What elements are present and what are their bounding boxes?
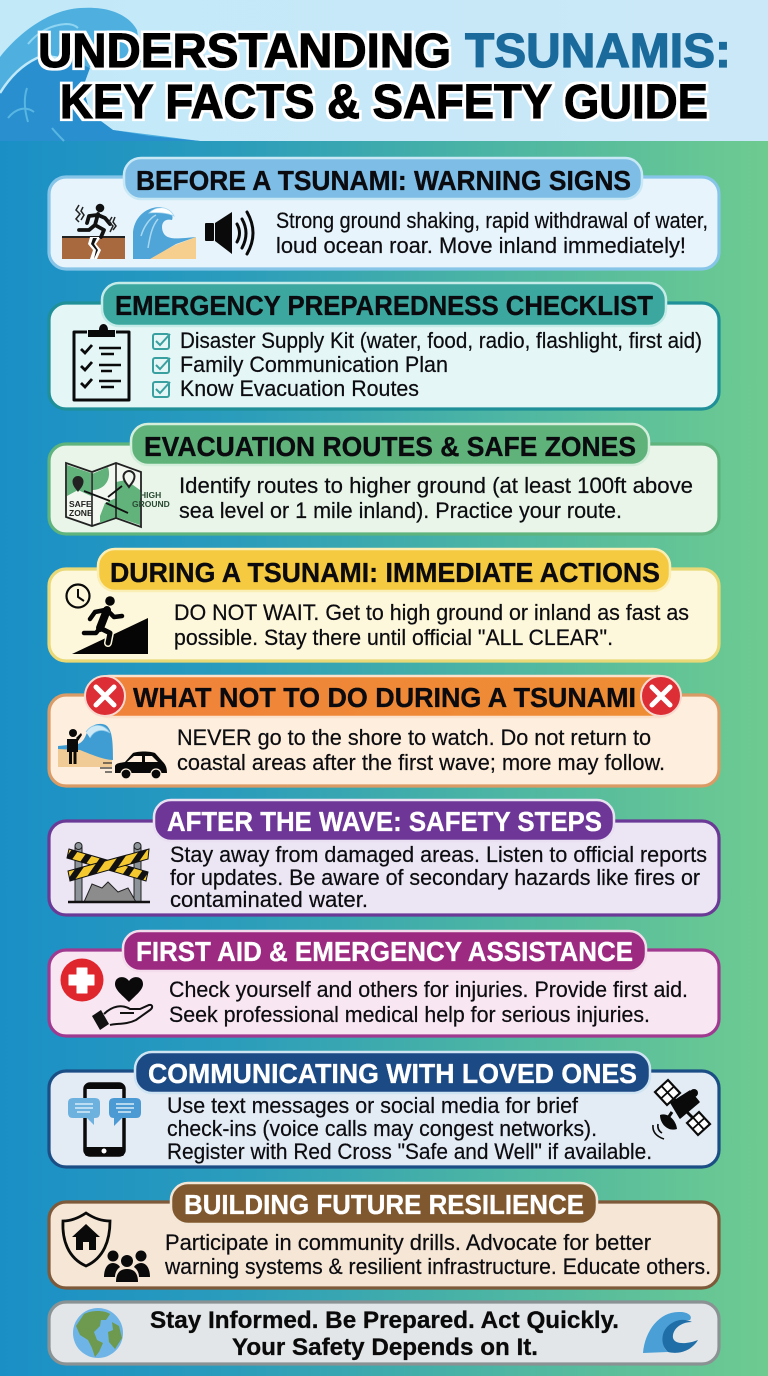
header band: [0, 0, 768, 141]
checklist items: Disaster Supply Kit (water, food, radio, flashlight, first aid): [180, 328, 702, 353]
icon: satellite: [653, 1080, 710, 1139]
heading: warning signs: BEFORE A TSUNAMI: WARNING SIGNS: [136, 165, 631, 196]
icon: globe: [73, 1308, 123, 1358]
heading: safety steps: AFTER THE WAVE: SAFETY STEPS: [167, 806, 602, 837]
text: resilience: Participate in community drills. Advocate for better: [165, 1230, 651, 1255]
text: safety steps: Stay away from damaged areas. Listen to official reports: [170, 842, 707, 867]
text: what not to do: [177, 725, 665, 775]
text: first aid: Seek professional medical help for serious injuries.: [169, 1002, 650, 1027]
icon: check 3: [153, 382, 170, 397]
text: resilience: warning systems & resilient infrastructure. Educate others.: [164, 1254, 711, 1279]
title: TSUNAMIS:: [465, 25, 731, 78]
heading: checklist: EMERGENCY PREPAREDNESS CHECKLIST: [115, 290, 653, 321]
panel: closing message: [49, 1302, 719, 1364]
text: loved ones: check-ins (voice calls may congest networks).: [167, 1116, 597, 1141]
text: evacuation: sea level or 1 mile inland). Practice your route.: [179, 498, 622, 523]
text: evacuation: Identify routes to higher ground (at least 100ft above: [179, 473, 693, 498]
text: warning signs: [276, 208, 708, 258]
icon: closing wave: [643, 1312, 698, 1353]
text: closing message: [150, 1307, 619, 1361]
icon: wave on beach: [133, 207, 196, 259]
checklist items: Know Evacuation Routes: [180, 376, 419, 401]
text: immediate actions: DO NOT WAIT. Get to high ground or inland as fast as: [174, 600, 689, 625]
panel: evacuation routes: [49, 424, 719, 534]
text: closing message: Your Safety Depends on It.: [232, 1334, 538, 1361]
text: first aid: Check yourself and others for injuries. Provide first aid.: [169, 977, 688, 1002]
icon: map: ZONE: [69, 508, 93, 518]
text: safety steps: [170, 842, 707, 912]
icon: check 1: [153, 334, 170, 349]
heading: first aid: FIRST AID & EMERGENCY ASSISTANCE: [136, 936, 633, 967]
icon: person watching wave: [58, 724, 113, 767]
icon: right x: [641, 676, 681, 716]
icon: map: [66, 463, 170, 527]
text: first aid: [169, 977, 688, 1027]
text: warning signs: Strong ground shaking, rapid withdrawal of water,: [276, 208, 708, 233]
panel: after the wave: [49, 800, 719, 915]
icon: road barrier with rubble: [67, 842, 150, 902]
title: [38, 25, 731, 129]
heading: what not to do: [92, 676, 676, 717]
icon: speaker: [205, 212, 253, 254]
panel: first aid: [49, 931, 719, 1036]
text: warning signs: loud ocean roar. Move inland immediately!: [276, 233, 686, 258]
text: resilience: [164, 1230, 711, 1279]
text: safety steps: contaminated water.: [170, 887, 368, 912]
panel: before a tsunami: [49, 158, 719, 269]
title: KEY FACTS & SAFETY GUIDE: [60, 76, 708, 129]
icon: left x: [85, 676, 125, 716]
heading: resilience: BUILDING FUTURE RESILIENCE: [184, 1189, 584, 1220]
text: immediate actions: [174, 600, 689, 650]
heading: loved ones: COMMUNICATING WITH LOVED ONES: [148, 1058, 637, 1089]
heading: checklist: [102, 283, 666, 326]
panel: preparedness checklist: [49, 283, 719, 409]
icon: header wave: [0, 8, 200, 141]
text: loved ones: Register with Red Cross "Safe and Well" if available.: [167, 1139, 652, 1164]
icon: car: [100, 752, 167, 779]
icon: heart and hand: [92, 977, 152, 1030]
checklist items: [153, 328, 702, 401]
heading: what not to do: WHAT NOT TO DO DURING A TSUNAMI: [133, 682, 636, 713]
text: what not to do: NEVER go to the shore to watch. Do not return to: [177, 725, 651, 750]
checklist items: Family Communication Plan: [180, 352, 448, 377]
icon: clipboard: [74, 324, 129, 400]
icon: people: [104, 1250, 150, 1282]
text: loved ones: [167, 1093, 652, 1164]
text: closing message: Stay Informed. Be Prepared. Act Quickly.: [150, 1307, 619, 1334]
icon: red cross: [60, 958, 104, 1002]
text: evacuation: [179, 473, 693, 523]
icon: shield with house: [63, 1213, 110, 1266]
icon: map: GROUND: [132, 499, 170, 509]
text: safety steps: for updates. Be aware of secondary hazards like fires or: [170, 865, 700, 890]
icon: check 2: [153, 358, 170, 373]
panel: what not to do: [49, 676, 719, 786]
icon: map: SAFE: [69, 499, 92, 509]
text: loved ones: Use text messages or social media for brief: [167, 1093, 579, 1118]
heading: evacuation: EVACUATION ROUTES & SAFE ZONES: [144, 431, 636, 462]
panel: communicating: [49, 1052, 719, 1167]
title: UNDERSTANDING: [38, 25, 451, 78]
text: immediate actions: possible. Stay there until official "ALL CLEAR".: [174, 625, 613, 650]
icon: earthquake: [62, 204, 125, 259]
panel: during a tsunami: [49, 549, 719, 661]
text: what not to do: coastal areas after the first wave; more may follow.: [177, 750, 665, 775]
heading: immediate actions: DURING A TSUNAMI: IMMEDIATE ACTIONS: [110, 557, 660, 588]
icon: phone with chat bubbles: [68, 1084, 141, 1156]
icon: map: HIGH: [140, 490, 161, 500]
panel: future resilience: [49, 1183, 719, 1288]
icon: clock and runner on slope: [66, 584, 148, 654]
